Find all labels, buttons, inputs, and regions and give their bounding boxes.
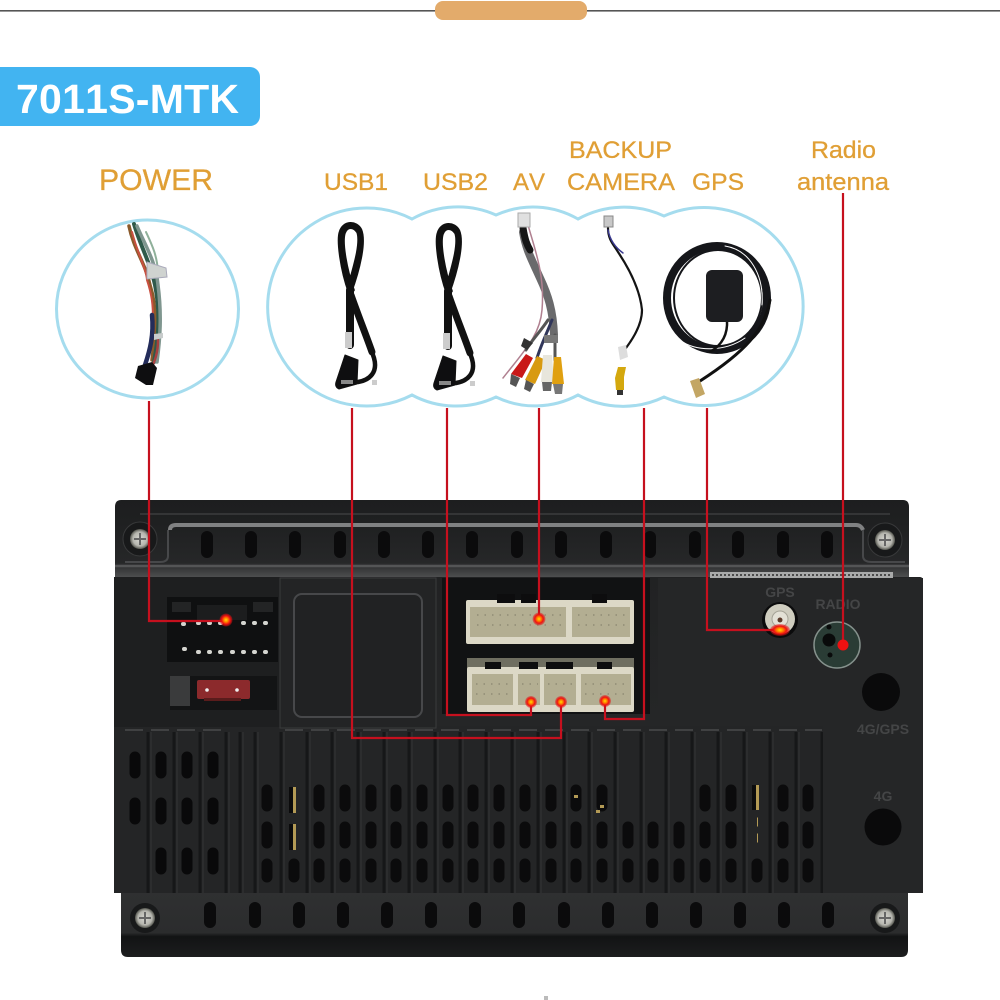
icon: AV cable [503,213,564,394]
model badge: 7011S-MTK [16,76,239,122]
cooling fins [114,726,823,893]
connector labels: GPS [692,169,744,196]
GPS port [762,584,798,638]
radio port: RADIO [815,596,861,612]
antenna panel [658,572,923,893]
bottom vent slots [210,908,828,922]
callout lines [149,193,843,738]
connector labels: AV [513,169,546,196]
icon: GPS antenna [667,246,770,398]
4G hole [864,788,902,846]
multi-pin connector panel [442,578,650,714]
connector labels: USB1 [324,169,388,196]
connector labels: antenna [797,169,889,196]
blank cover plate [280,578,436,728]
fuse holder [170,676,277,710]
4G/GPS hole: 4G/GPS [857,721,909,737]
top tab [435,1,587,20]
lower connector block [467,658,634,712]
power circle [56,220,238,398]
connector labels: Radio [811,137,876,164]
head unit [114,500,923,957]
connector labels: BACKUP [569,137,672,164]
top rule [0,10,1000,12]
power socket [167,597,278,662]
icon: USB1 cable [336,224,377,389]
main body [114,577,923,893]
bottom edge fragment [544,996,548,1000]
model badge [0,67,260,126]
connector labels: USB2 [423,169,488,196]
left power section [114,577,280,727]
top bezel [115,500,909,578]
4G hole: 4G [874,788,892,804]
4G/GPS hole [857,673,909,737]
radio port [814,596,861,668]
top vent slots [207,537,827,552]
screws [123,522,902,933]
icon: power harness [129,224,167,385]
icon: camera cable [604,216,642,395]
connector labels: CAMERA [567,169,676,196]
callout dots [220,612,848,708]
fin slots [135,757,213,869]
GPS port: GPS [765,584,795,600]
icon: USB2 cable [434,225,475,390]
connector labels: POWER [99,164,213,197]
cable bubble outline [268,207,803,406]
upper connector block [466,594,634,644]
connector labels [99,137,889,197]
bottom bezel [121,893,908,957]
